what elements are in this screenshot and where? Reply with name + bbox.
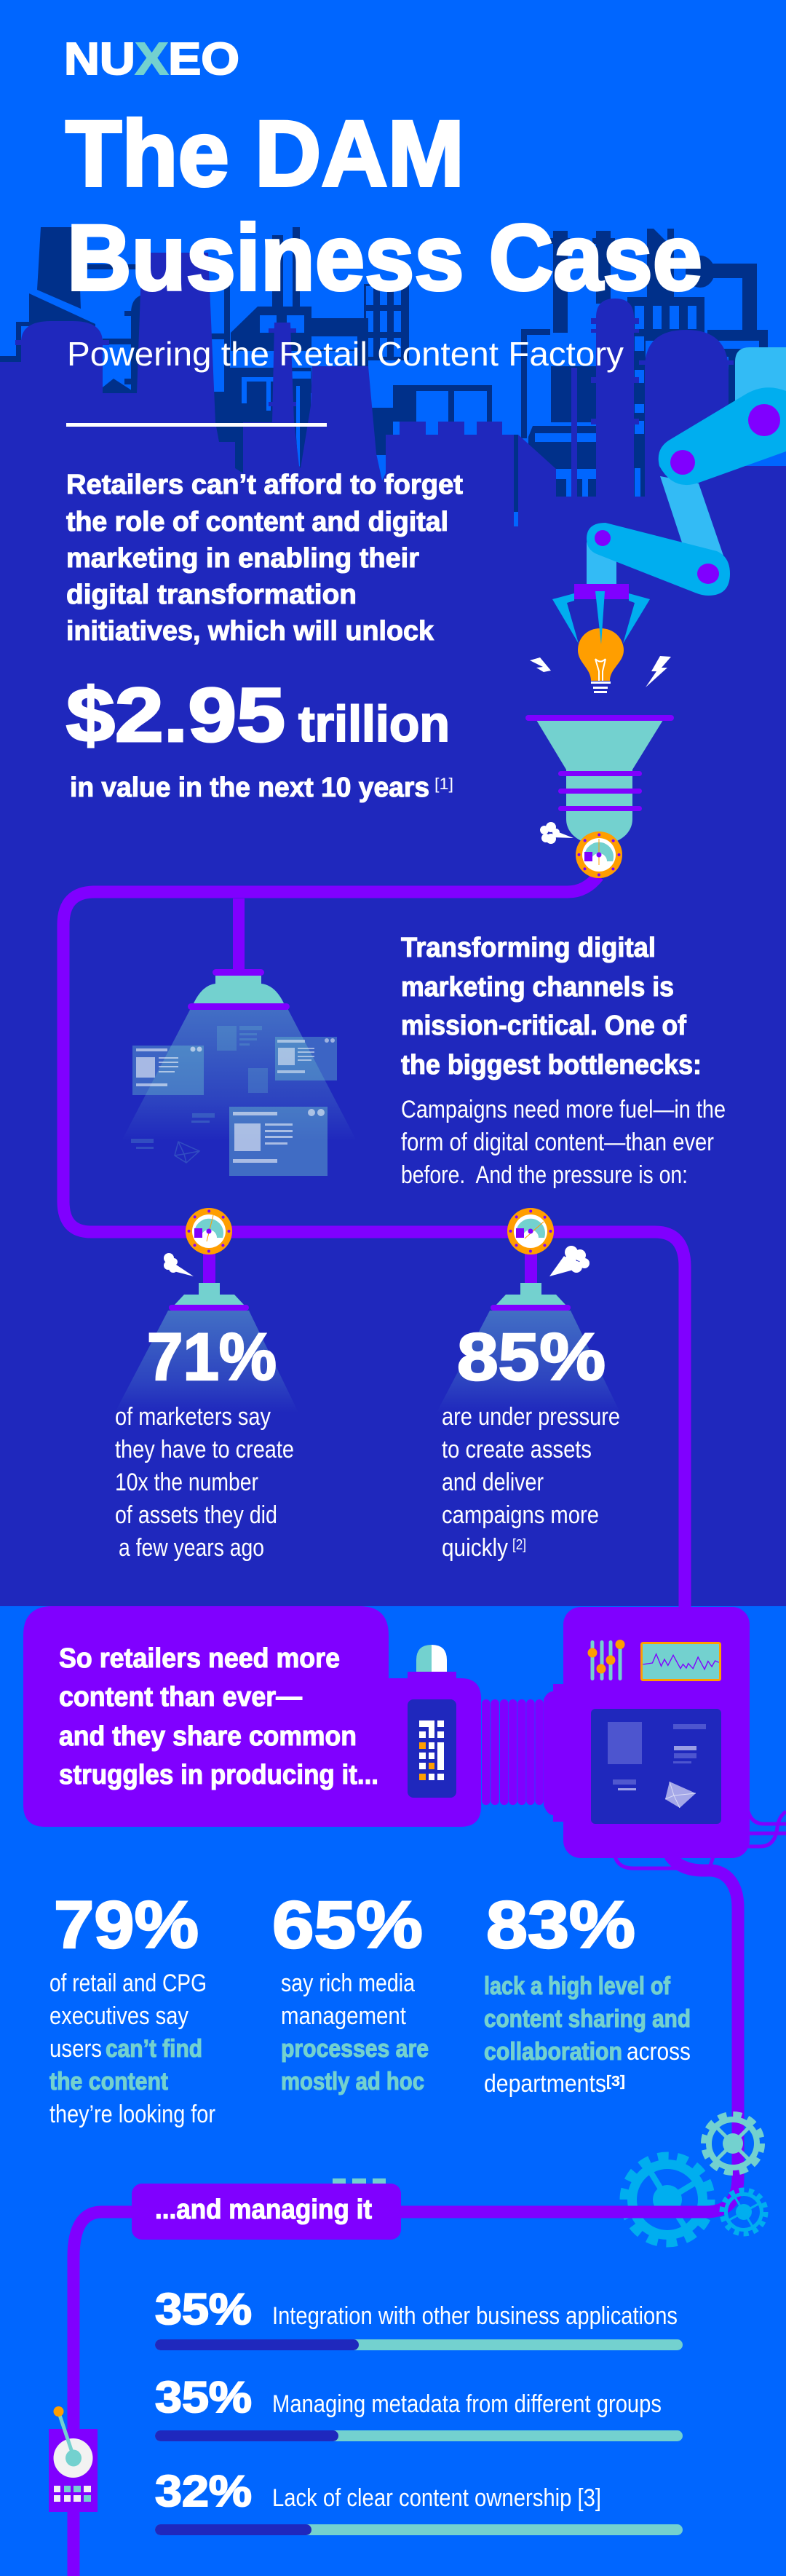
icon: small cyan gear [722,2190,766,2234]
value caption: [1] [434,775,453,793]
stat: 85 percent: campaigns more [442,1501,599,1529]
icon: light bulb [578,591,624,693]
big number: 2.95 trillion: trillion [298,695,450,752]
bar row: ownership: 32% [155,2467,252,2516]
icon: steam puff [540,822,573,844]
machine tendril cables [615,1812,786,1868]
stat: 71 percent: of marketers say [115,1403,271,1431]
skyline: background factory layer [0,227,768,497]
panel: control machine [563,1607,750,1858]
stat: 71 percent: of assets they did [115,1501,277,1529]
body text: campaigns: before. And the pressure is on: [401,1161,688,1189]
stat: 71 percent: 71% [147,1320,277,1394]
sliders [588,1640,624,1680]
title [66,102,702,310]
bar row: integration [155,2285,683,2350]
stat: 79 percent: of retail and CPG [49,1969,207,1997]
stat: 79 percent: executives say [49,2002,188,2030]
data screen [591,1709,721,1824]
stat: 79 percent: can’t find [106,2035,202,2063]
logo: NUXEO [64,34,239,84]
pipe: gear run [393,2173,738,2212]
intro text: the role of content and digital [66,507,448,537]
bar row: ownership [155,2467,683,2535]
stat: 85 percent: and deliver [442,1469,544,1496]
big number: 2.95 trillion: $2.95 [66,673,285,758]
section text: digital marketing channels: mission-critical. One of [401,1011,686,1041]
lamp with light beam and content windows [122,969,357,1176]
title: The DAM [66,102,464,206]
icon: teal gear [704,2114,762,2173]
stat: 79 percent [49,1888,215,2128]
control box with lever [49,2406,98,2512]
section text: digital marketing channels [401,933,702,1080]
heading: and managing it [132,2184,401,2240]
bar row: metadata: Managing metadata from different groups [272,2390,662,2418]
panel text: struggles: content than ever— [59,1682,302,1712]
stat: 83 percent: [3] [606,2074,625,2090]
faded elements [131,1026,268,1163]
big number: 2.95 trillion [66,673,450,758]
stat: 85 percent: [2] [512,1537,526,1553]
section text: digital marketing channels: Transforming digital [401,933,656,963]
stat: 85 percent [442,1320,620,1562]
panel text: struggles [59,1643,378,1790]
stat: 65 percent [272,1888,429,2095]
stat: 71 percent: 10x the number [115,1469,258,1496]
section text: digital marketing channels: the biggest bottlenecks: [401,1050,702,1080]
stat: 85 percent: quickly [442,1534,508,1562]
stat: 65 percent: processes are [281,2035,429,2063]
pipe: branch to lamp [233,898,245,971]
bellows connector [482,1684,563,1822]
pipe: machine to gears [670,1855,738,2177]
gauge lamp: 85 percent [437,1208,620,1413]
heading: and managing it: ...and managing it [155,2194,372,2225]
icon: beacon [416,1645,447,1672]
body text: campaigns: form of digital content—than ever [401,1129,714,1156]
pipe: main top run [63,876,685,1613]
stat: 83 percent: lack a high level of [484,1972,671,2000]
illustration: robot arm [552,347,786,644]
pipe: left run to control box [74,2212,138,2576]
stat: 83 percent: across [627,2038,691,2066]
stat: 83 percent [484,1888,691,2098]
keypad [408,1699,456,1798]
panel text: struggles: struggles in producing it... [59,1760,378,1790]
dashes above heading [333,2178,386,2184]
stat: 83 percent: departments [484,2070,606,2098]
value caption: in value in the next 10 years [70,773,429,803]
stat: 79 percent: the content [49,2068,168,2095]
stat: 79 percent: they’re looking for [49,2101,215,2128]
skyline: bright window cut-outs [242,306,759,497]
intro text [66,470,463,647]
window 1 [132,1046,204,1095]
stat: 83 percent: collaboration [484,2038,622,2066]
skyline: foreground factory silhouette [0,253,786,526]
icon: lightning bolts [530,656,671,687]
bar row: metadata: 35% [155,2373,252,2422]
monitor with waveform [642,1643,720,1680]
stat: 83 percent: content sharing and [484,2005,691,2033]
icon: big cyan gear [624,2156,711,2243]
section text: digital marketing channels: marketing channels is [401,972,674,1003]
stat: 65 percent: management [281,2002,406,2030]
stat: 83 percent: 83% [486,1888,635,1962]
stat: 79 percent: 79% [54,1888,199,1962]
stat: 85 percent: to create assets [442,1436,592,1463]
icon: gauge on funnel [576,831,622,878]
stat: 85 percent: are under pressure [442,1403,620,1431]
stat: 71 percent: a few years ago [119,1534,264,1562]
gauge lamp: 71 percent [115,1208,298,1413]
subtitle: Powering the Retail Content Factory [67,335,624,373]
panel text: struggles: So retailers need more [59,1643,340,1674]
stat: 71 percent [115,1320,294,1562]
intro text: initiatives, which will unlock [66,616,434,647]
bar row: integration: Integration with other business applications [272,2302,678,2330]
stat: 65 percent: say rich media [281,1969,415,1997]
icon: funnel [525,715,674,845]
bar row: metadata [155,2373,683,2441]
stat: 85 percent: 85% [457,1320,606,1394]
intro text: digital transformation [66,580,357,610]
stat: 79 percent: users [49,2035,102,2063]
bar row: integration: 35% [155,2285,252,2334]
panel text: struggles: and they share common [59,1721,357,1752]
intro text: Retailers can’t afford to forget [66,470,463,500]
panel: struggles callout machine [23,1606,481,1827]
bar row: ownership: Lack of clear content ownership [3] [272,2484,601,2512]
stat: 65 percent: mostly ad hoc [281,2068,424,2095]
stat: 65 percent: 65% [272,1888,423,1962]
body text: campaigns: Campaigns need more fuel—in the [401,1096,726,1123]
title: Business Case [67,206,702,310]
window 3 [229,1107,328,1176]
body text: campaigns [401,1096,726,1189]
stat: 71 percent: they have to create [115,1436,294,1463]
window 2 [275,1037,337,1080]
intro text: marketing in enabling their [66,543,419,574]
